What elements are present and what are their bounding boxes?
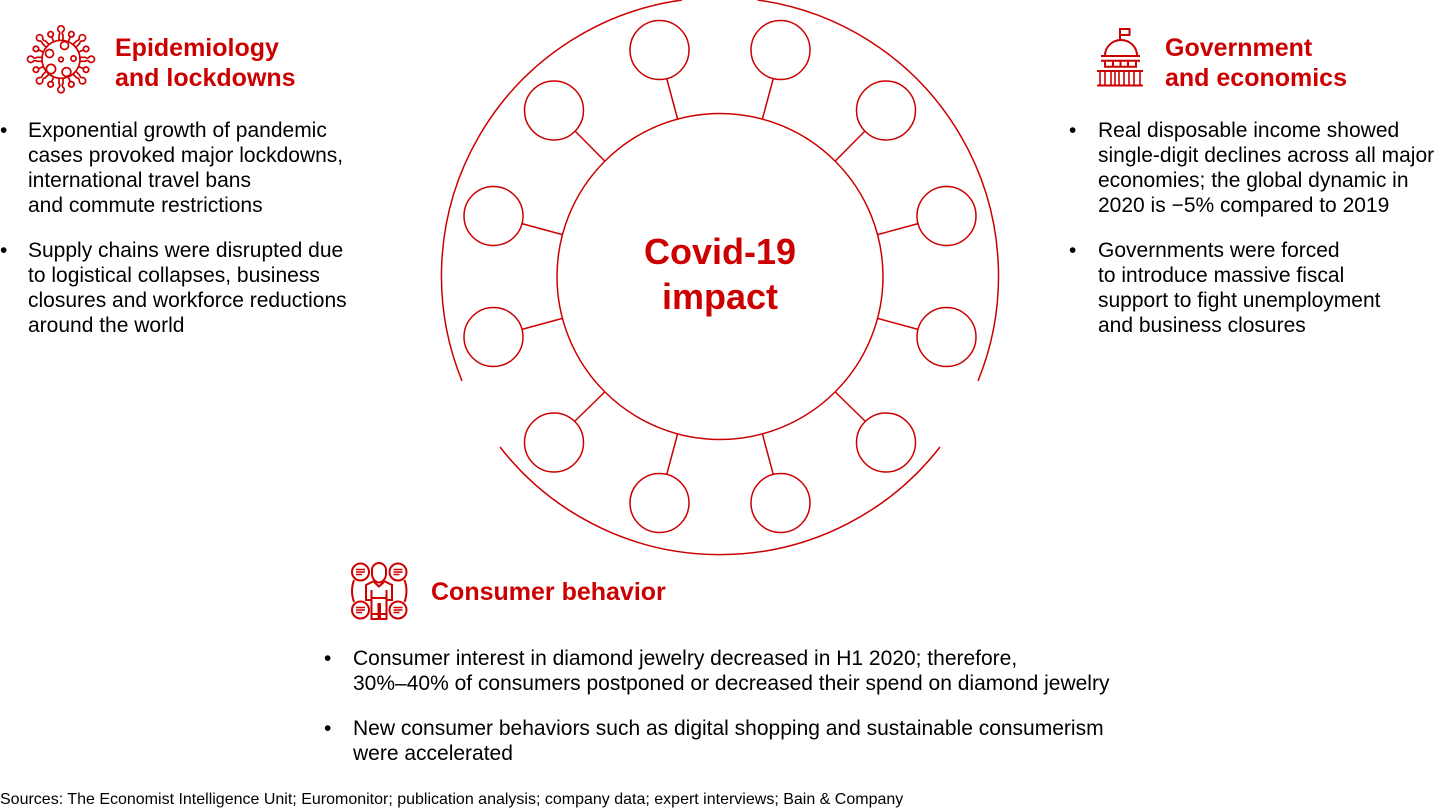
bullet 2: to introduce massive fiscal — [1098, 264, 1344, 287]
bullet 2: support to fight unemployment — [1098, 289, 1380, 312]
bullet 2: and business closures — [1098, 314, 1306, 337]
bullet 2 — [324, 717, 1104, 765]
bullet 1 — [0, 119, 343, 217]
spike circles — [464, 20, 976, 532]
bullet 1: economies; the global dynamic in — [1098, 169, 1409, 192]
bullet 2: to logistical collapses, business — [28, 264, 320, 287]
text block: government bullets — [1069, 119, 1434, 337]
bullet 2: New consumer behaviors such as digital shopping and sustainable consumerism — [353, 717, 1104, 740]
heading: Government and economics — [1165, 34, 1347, 92]
text block: government bullets: • — [1069, 119, 1076, 142]
bullet 2: Supply chains were disrupted due — [28, 239, 343, 262]
outer arc: bottom — [500, 447, 940, 555]
text block: epidemiology bullets: • — [0, 119, 7, 142]
bullet 1: Exponential growth of pandemic — [28, 119, 327, 142]
text block: government bullets: • — [1069, 239, 1076, 262]
bullet 1: international travel bans — [28, 169, 251, 192]
bullet 1: and commute restrictions — [28, 194, 263, 217]
heading: Government and economics: Government — [1165, 34, 1312, 62]
outer arc: left — [441, 0, 682, 381]
text block: consumer bullets: • — [324, 647, 331, 670]
bullet 2: around the world — [28, 314, 184, 337]
text block: epidemiology bullets: • — [0, 239, 7, 262]
heading: Epidemiology and lockdowns — [115, 34, 296, 92]
bullet 2: closures and workforce reductions — [28, 289, 347, 312]
source note: Sources: The Economist Intelligence Unit; Euromonitor; publication analysis; company data; expert interviews; Bain & Company — [0, 791, 903, 808]
heading: Government and economics: and economics — [1165, 64, 1347, 92]
bullet 1: 30%–40% of consumers postponed or decreased their spend on diamond jewelry — [353, 672, 1109, 695]
bullet 1: Real disposable income showed — [1098, 119, 1399, 142]
text block: epidemiology bullets — [0, 119, 347, 337]
heading: Consumer behavior: Consumer behavior — [431, 578, 666, 606]
spike connectors — [522, 78, 918, 474]
bullet 1: single-digit declines across all major — [1098, 144, 1434, 167]
text block: consumer bullets: • — [324, 717, 331, 740]
bullet 2 — [0, 239, 347, 337]
bullet 1: 2020 is −5% compared to 2019 — [1098, 194, 1389, 217]
bullet 2: were accelerated — [353, 742, 513, 765]
text block: consumer bullets — [324, 647, 1110, 765]
heading: Epidemiology and lockdowns: and lockdowns — [115, 64, 296, 92]
center title: impact — [662, 276, 778, 317]
center title — [644, 231, 796, 317]
bullet 2: Governments were forced — [1098, 239, 1340, 262]
bullet 1 — [1069, 119, 1434, 217]
center title: Covid-19 — [644, 231, 796, 272]
central circle — [557, 114, 883, 440]
bullet 1: cases provoked major lockdowns, — [28, 144, 343, 167]
bullet 2 — [1069, 239, 1380, 337]
bullet 1 — [324, 647, 1110, 695]
outer arc: right — [758, 0, 999, 381]
heading: Epidemiology and lockdowns: Epidemiology — [115, 34, 279, 62]
bullet 1: Consumer interest in diamond jewelry decreased in H1 2020; therefore, — [353, 647, 1017, 670]
